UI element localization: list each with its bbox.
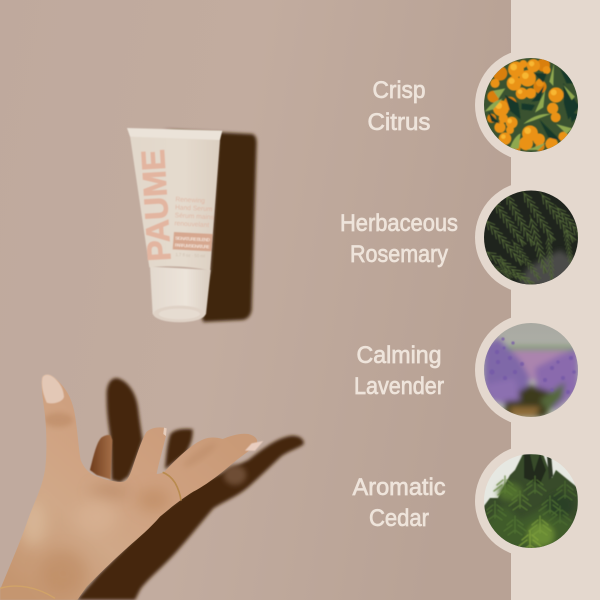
- tube crimp: [127, 128, 222, 140]
- label: crisp citrus: Citrus: [368, 109, 430, 136]
- product shadow: [163, 129, 257, 322]
- product description: Renewing: [175, 196, 205, 205]
- product description: Hand Serum: [175, 204, 213, 213]
- photo: cedar: [484, 454, 578, 550]
- product tube: [127, 128, 222, 322]
- middle fingertip highlight: [163, 428, 167, 436]
- side panel: [475, 0, 600, 600]
- product badge: PARFUM SIGNATURE: [175, 243, 210, 249]
- product badge: [173, 232, 213, 251]
- label: herbaceous rosemary: Herbaceous: [340, 210, 458, 237]
- hand shadow: [77, 378, 304, 600]
- tube cap: [150, 267, 211, 322]
- tube body: [130, 136, 220, 271]
- product description: renouvelant: [174, 220, 209, 229]
- bracelet: [0, 586, 55, 598]
- label: calming lavender: [354, 342, 444, 400]
- label: aromatic cedar: [352, 474, 446, 532]
- label: herbaceous rosemary: Rosemary: [350, 241, 448, 268]
- photo: rosemary: [484, 190, 578, 284]
- brand name: PAUME: [134, 148, 178, 262]
- label: crisp citrus: Crisp: [372, 77, 426, 104]
- hand: [0, 360, 267, 600]
- product description: [174, 196, 215, 229]
- pinky nail: [245, 441, 263, 451]
- label: crisp citrus: [368, 77, 430, 136]
- label: herbaceous rosemary: [340, 210, 458, 268]
- label: aromatic cedar: Aromatic: [352, 474, 446, 501]
- thumb nail: [42, 375, 64, 403]
- palm and fingers: [0, 360, 267, 600]
- product description: Sérum mains: [175, 212, 215, 221]
- ring: [163, 472, 181, 501]
- photo: citrus: [484, 58, 579, 152]
- label: calming lavender: Calming: [356, 342, 442, 369]
- net volume: 1.7 fl oz · 50 ml: [175, 252, 205, 259]
- label: aromatic cedar: Cedar: [369, 505, 429, 532]
- label: calming lavender: Lavender: [354, 373, 444, 400]
- product badge: SIGNATURE BLEND: [175, 236, 211, 243]
- back finger: [90, 435, 112, 479]
- photo: lavender: [484, 323, 578, 417]
